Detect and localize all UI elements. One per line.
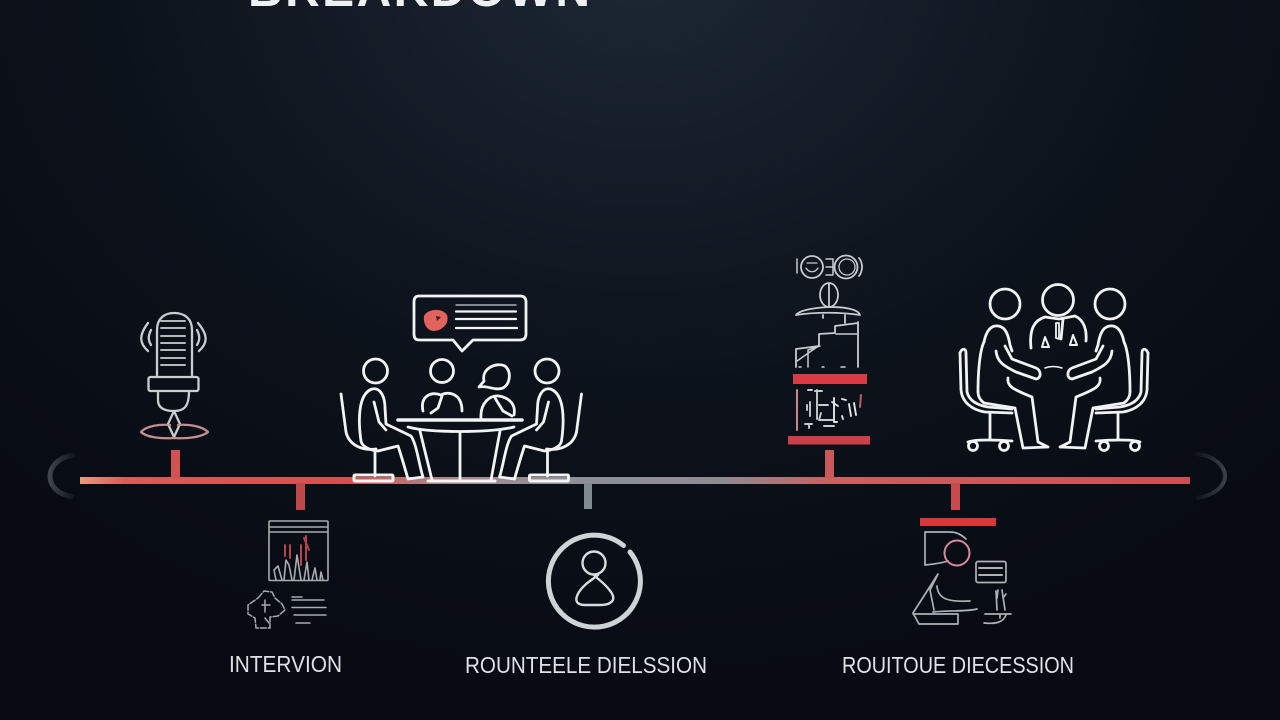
centre left person bbox=[422, 360, 462, 413]
icon: three people in consultation bbox=[960, 284, 1148, 450]
icon: cloud with notes bbox=[248, 591, 326, 628]
stub 4 bbox=[825, 450, 834, 478]
right seated person bbox=[500, 359, 582, 481]
stub 3 bbox=[584, 483, 592, 509]
left person in chair bbox=[960, 289, 1048, 450]
stub 5 bbox=[951, 483, 960, 510]
figure on a platform bbox=[796, 283, 860, 323]
icon: chart window bbox=[269, 521, 328, 580]
icon: roundtable meeting bbox=[341, 296, 582, 481]
dense data panel bbox=[797, 390, 861, 430]
label: ROUITOUE DIECESSION bbox=[842, 652, 1074, 678]
right end arc bbox=[1195, 454, 1225, 498]
staircase bbox=[796, 322, 858, 367]
right person in chair bbox=[1060, 289, 1148, 450]
timeline axis bbox=[50, 450, 1225, 510]
left end arc bbox=[50, 455, 75, 497]
centre right person bbox=[479, 365, 514, 418]
step: roundtable discussion bbox=[465, 535, 707, 678]
table bbox=[398, 420, 522, 481]
upper red bar bbox=[793, 374, 867, 384]
step: routine discussion bbox=[842, 518, 1074, 678]
stub 2 bbox=[296, 483, 305, 510]
lower red bar bbox=[788, 436, 870, 444]
icon: microphone bbox=[141, 313, 208, 438]
left seated person bbox=[341, 359, 423, 481]
centre person bbox=[1031, 284, 1086, 368]
step: interview bbox=[229, 521, 342, 677]
label: INTERVION bbox=[229, 651, 342, 677]
speech bubble bbox=[414, 296, 526, 351]
label: ROUNTEELE DIELSSION bbox=[465, 652, 707, 678]
stub 1 bbox=[171, 450, 180, 478]
red bar bbox=[920, 518, 996, 526]
top circles bbox=[797, 256, 862, 278]
icon: person at laptop bbox=[913, 532, 1011, 624]
main line bbox=[80, 477, 1190, 484]
icon: career staircase and data bbox=[788, 256, 870, 444]
icon: person in ring bbox=[548, 535, 640, 627]
